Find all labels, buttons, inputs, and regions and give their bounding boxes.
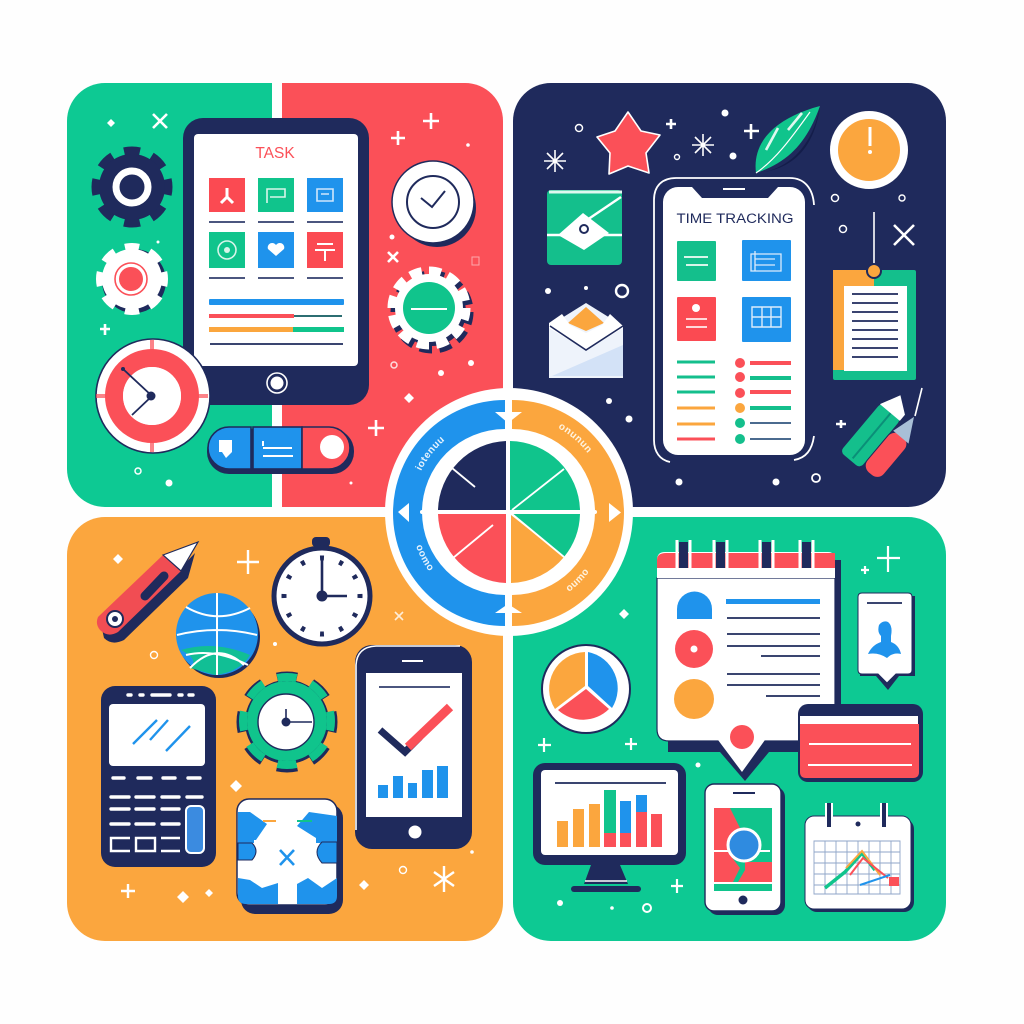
icon: feather leaf bbox=[756, 106, 820, 173]
home button bbox=[267, 373, 287, 393]
panel background: green half bbox=[67, 83, 272, 507]
wheel ring: orange half bbox=[512, 400, 624, 626]
icon: red star bbox=[597, 112, 660, 174]
wheel curved labels: iotenuu bbox=[414, 436, 444, 470]
calendar dots bbox=[674, 592, 754, 749]
icon: green envelope bbox=[547, 190, 622, 265]
panel background: red half bbox=[282, 83, 503, 507]
panel: reports and calendar bbox=[513, 517, 946, 941]
panel: task management bbox=[67, 83, 503, 507]
panel background bbox=[513, 517, 946, 941]
icon: calendar with line chart bbox=[805, 803, 914, 912]
icon: stopwatch bbox=[274, 537, 370, 644]
binder rings bbox=[677, 540, 813, 568]
phone tiles bbox=[677, 240, 791, 342]
icon: orange alert clock bbox=[834, 115, 904, 185]
panel background bbox=[513, 83, 946, 507]
sparkles bbox=[538, 546, 900, 912]
wheel pie: navy sector bbox=[438, 441, 506, 510]
icon: tablet bbox=[183, 118, 369, 405]
sparkles bbox=[544, 110, 914, 486]
icon: red timer clock bbox=[96, 339, 210, 453]
icon: hanging clipboard bbox=[833, 212, 916, 380]
icon: phone with checkmark bbox=[355, 645, 472, 849]
icon: calculator bbox=[101, 686, 216, 867]
wheel ring: blue half bbox=[393, 400, 505, 626]
icon: white gear with red centre bbox=[100, 247, 166, 313]
panel background bbox=[67, 517, 503, 941]
wheel curved labels: onunun bbox=[559, 424, 591, 453]
icon: pens bbox=[840, 388, 925, 481]
icon: calendar speech note bbox=[657, 540, 841, 781]
icon: smartphone bbox=[654, 178, 814, 462]
wheel pie: green sectors bbox=[510, 441, 580, 557]
central wheel bbox=[385, 388, 633, 636]
phone heading: TIME TRACKING bbox=[676, 211, 794, 226]
icon: red card bbox=[798, 704, 923, 782]
wheel spokes bbox=[452, 468, 564, 558]
panel: tools and schedule bbox=[67, 517, 503, 941]
panel: time tracking bbox=[513, 83, 946, 507]
icon: white clock with check bbox=[392, 161, 476, 247]
icon: phone with map bbox=[705, 784, 785, 915]
sparkles bbox=[113, 550, 474, 903]
icon: puzzle block bbox=[237, 799, 343, 914]
wheel pie: orange sector bbox=[511, 515, 564, 583]
icon: red marker pen bbox=[97, 542, 198, 643]
icon: small location note bbox=[858, 593, 915, 690]
icon: green gear clock bbox=[242, 677, 332, 767]
icon: navy gear bbox=[96, 151, 168, 223]
icon: white envelope bbox=[549, 303, 623, 378]
icon: monitor with bar chart bbox=[533, 763, 686, 892]
progress bars bbox=[209, 299, 344, 345]
task tiles bbox=[209, 178, 343, 268]
sparkles bbox=[100, 113, 479, 486]
wheel curved labels: oomo bbox=[416, 545, 432, 570]
icon: toggle pill bbox=[207, 427, 354, 474]
wheel curved labels: oumo bbox=[566, 570, 588, 591]
pie chart bbox=[542, 645, 630, 733]
wheel curved labels bbox=[414, 424, 591, 591]
wheel axis bar bbox=[422, 510, 595, 514]
wheel arrow markers bbox=[398, 412, 621, 613]
wheel pie: red sector bbox=[438, 514, 506, 583]
phone list rows bbox=[677, 358, 791, 444]
icon: white gear with green centre bbox=[393, 272, 468, 348]
icon: globe bbox=[176, 593, 260, 678]
tablet heading: TASK bbox=[255, 145, 295, 162]
calendar text lines bbox=[727, 618, 820, 696]
tile captions bbox=[209, 222, 343, 278]
